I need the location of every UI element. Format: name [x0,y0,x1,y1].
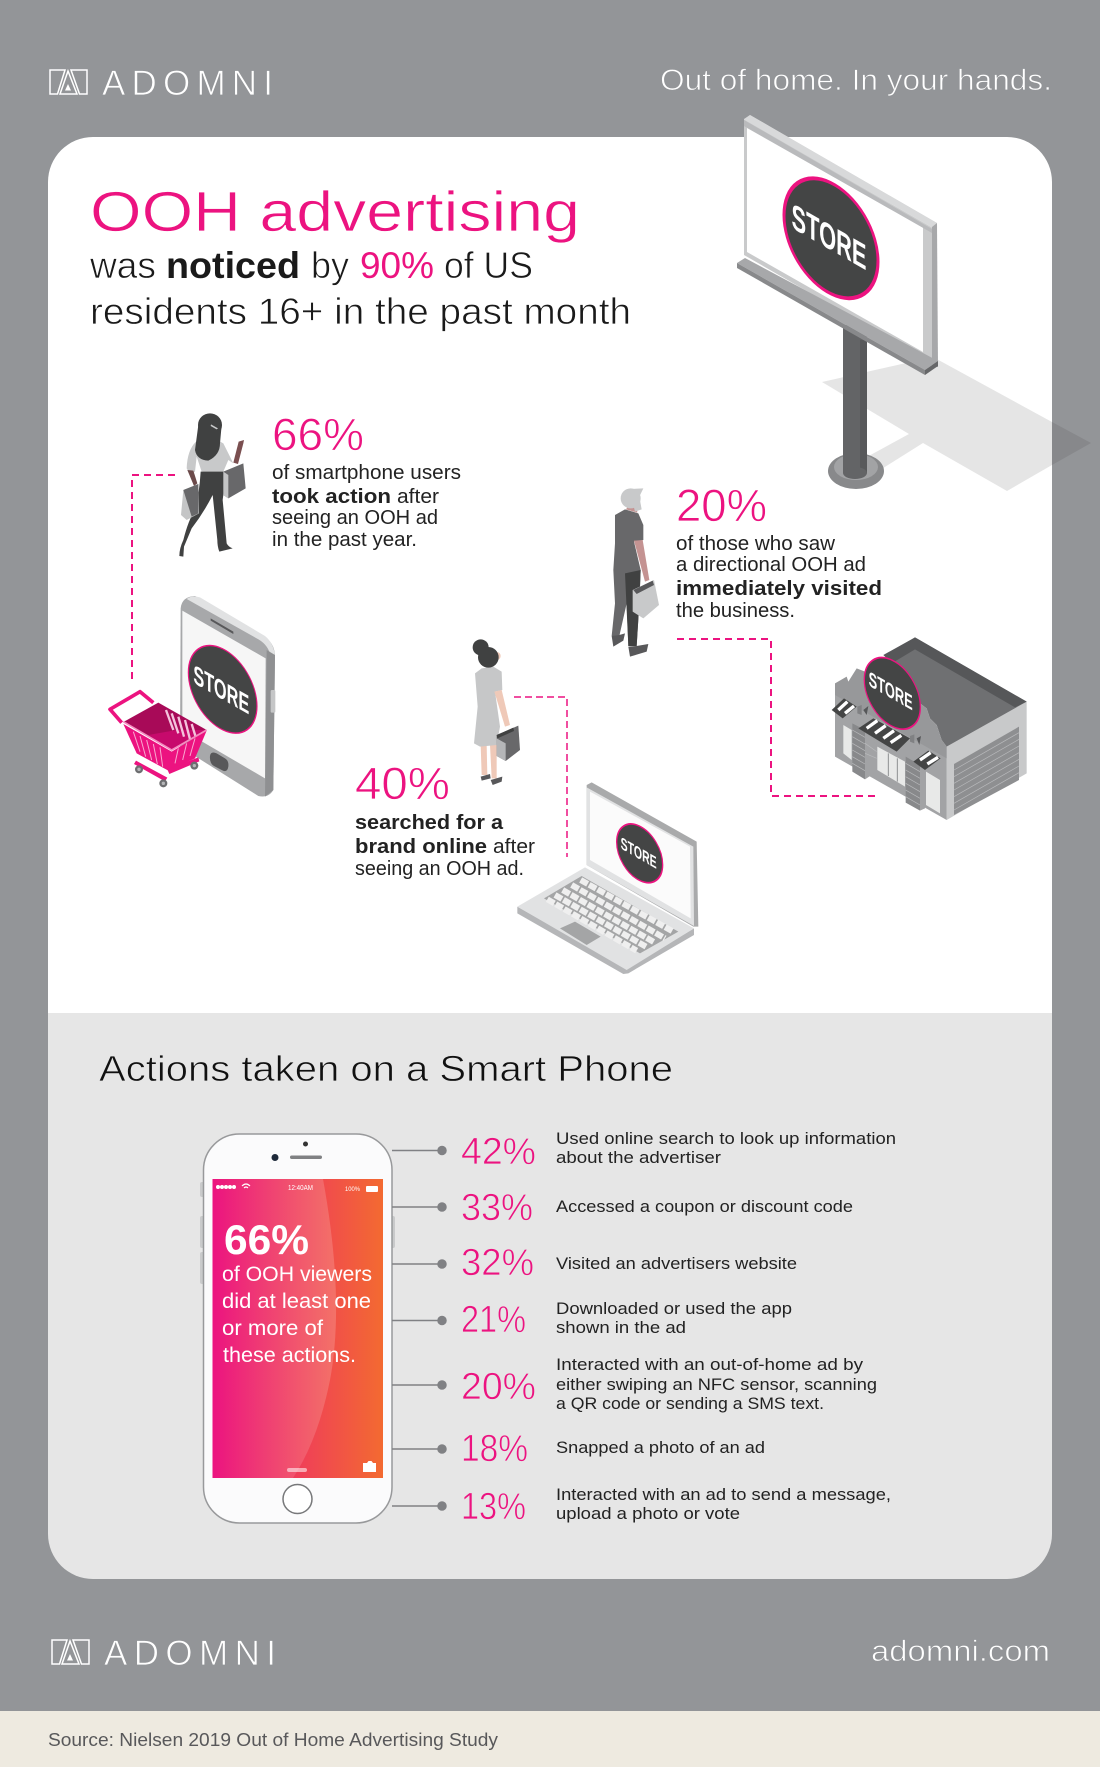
stat: 40%: 40% [355,758,450,809]
store sign [864,647,920,740]
stat: 40% [355,758,535,880]
phone screen: 12:40AM [288,1185,313,1192]
footer url: adomni.com [871,1635,1050,1668]
row 32% [461,1242,797,1284]
phone text: did at least one [222,1290,371,1313]
row 21%: shown in the ad [556,1318,686,1337]
icon: camera [363,1461,376,1472]
main card [48,137,1052,1579]
phone screen: 100% [345,1186,360,1193]
icon: shopping cart [110,692,207,787]
icon: laptop [517,782,698,974]
row 20% [461,1355,877,1413]
stat: 20%: a directional OOH ad [676,554,866,576]
row 18%: Snapped a photo of an ad [556,1438,765,1457]
headline [89,180,631,332]
store sign: STORE [621,833,657,873]
section heading: Actions taken on a Smart Phone [99,1048,673,1089]
icon: man with bag [612,488,659,657]
connector: woman to laptop [514,697,567,857]
stat: 66%: took action [272,486,391,508]
store sign: STORE [792,196,866,279]
stat: 66%: 66% [272,409,364,460]
source band [0,1711,1100,1767]
stat: 40%: brand online [355,836,487,858]
icon: Adomni mark [52,1640,89,1664]
store sign: STORE [193,660,249,721]
stat: 40%: seeing an OOH ad. [355,858,524,880]
stat: 20%: immediately visited [676,578,882,600]
connector: shopper to phone [132,475,175,680]
tagline: Out of home. In your hands. [660,64,1052,97]
stat: 66%: of smartphone users [272,462,461,484]
row 18% [461,1428,765,1470]
row 13%: 13% [461,1486,526,1528]
stat: 20%: of those who saw [676,533,836,555]
row 20%: 20% [461,1366,536,1408]
phone stat: 66% [224,1216,309,1263]
store sign [617,815,663,892]
icon: smartphone with cart [110,596,275,797]
row 13%: upload a photo or vote [556,1504,740,1523]
stat: 66% [272,409,461,551]
stat: 66%: in the past year. [272,529,417,551]
source band: Source: Nielsen 2019 Out of Home Advertising Study [48,1730,498,1750]
row 33%: 33% [461,1187,533,1229]
stat: 20%: the business. [676,600,795,622]
subtitle: residents 16+ in the past month [90,291,631,332]
icon: store building [832,637,1027,820]
icon: woman with bag [473,639,520,785]
row 42%: 42% [461,1131,536,1173]
store sign: STORE [869,667,913,715]
stat: 66%: seeing an OOH ad [272,507,438,529]
subtitle: 90% [360,245,434,286]
row 13%: Interacted with an ad to send a message, [556,1485,891,1504]
row 42%: Used online search to look up information [556,1129,896,1148]
row 33% [461,1187,853,1229]
row 21%: 21% [461,1299,526,1341]
row 33%: Accessed a coupon or discount code [556,1197,853,1216]
footer logo: ADOMNI [104,1634,276,1673]
icon: shopper woman [179,413,246,557]
row 21%: Downloaded or used the app [556,1299,792,1318]
stat: 20% [676,480,882,622]
row 20%: a QR code or sending a SMS text. [556,1394,824,1413]
store sign [188,632,257,747]
stat: 40%: after [493,836,535,858]
connector lines [392,1146,446,1510]
subtitle: of US [444,245,533,286]
actions list [392,1129,896,1528]
row 18%: 18% [461,1428,528,1470]
stat: 40%: searched for a [355,812,504,834]
connector: man to store [677,639,876,796]
subtitle [89,245,631,332]
stat: 66%: after [397,486,439,508]
subtitle: by [311,245,349,286]
phone text: of OOH viewers [222,1263,372,1286]
subtitle: was [89,245,156,286]
row 20%: either swiping an NFC sensor, scanning [556,1375,877,1394]
row 32%: Visited an advertisers website [556,1254,797,1273]
phone text [222,1263,372,1367]
row 42% [461,1129,896,1173]
row 32%: 32% [461,1242,534,1284]
title: OOH advertising [90,180,580,244]
phone text: or more of [222,1317,323,1340]
stat: 20%: 20% [676,480,767,531]
row 42%: about the advertiser [556,1148,721,1167]
row 20%: Interacted with an out-of-home ad by [556,1355,864,1374]
subtitle: noticed [166,245,300,286]
icon: Adomni mark [50,70,87,94]
icon: phone mockup [200,1134,395,1523]
billboard illustration [737,115,1091,491]
row 13% [461,1485,891,1528]
phone screen [212,1179,383,1478]
phone text: these actions. [223,1344,356,1367]
header logo: ADOMNI [102,64,273,103]
store sign [784,160,878,317]
row 21% [461,1299,792,1341]
